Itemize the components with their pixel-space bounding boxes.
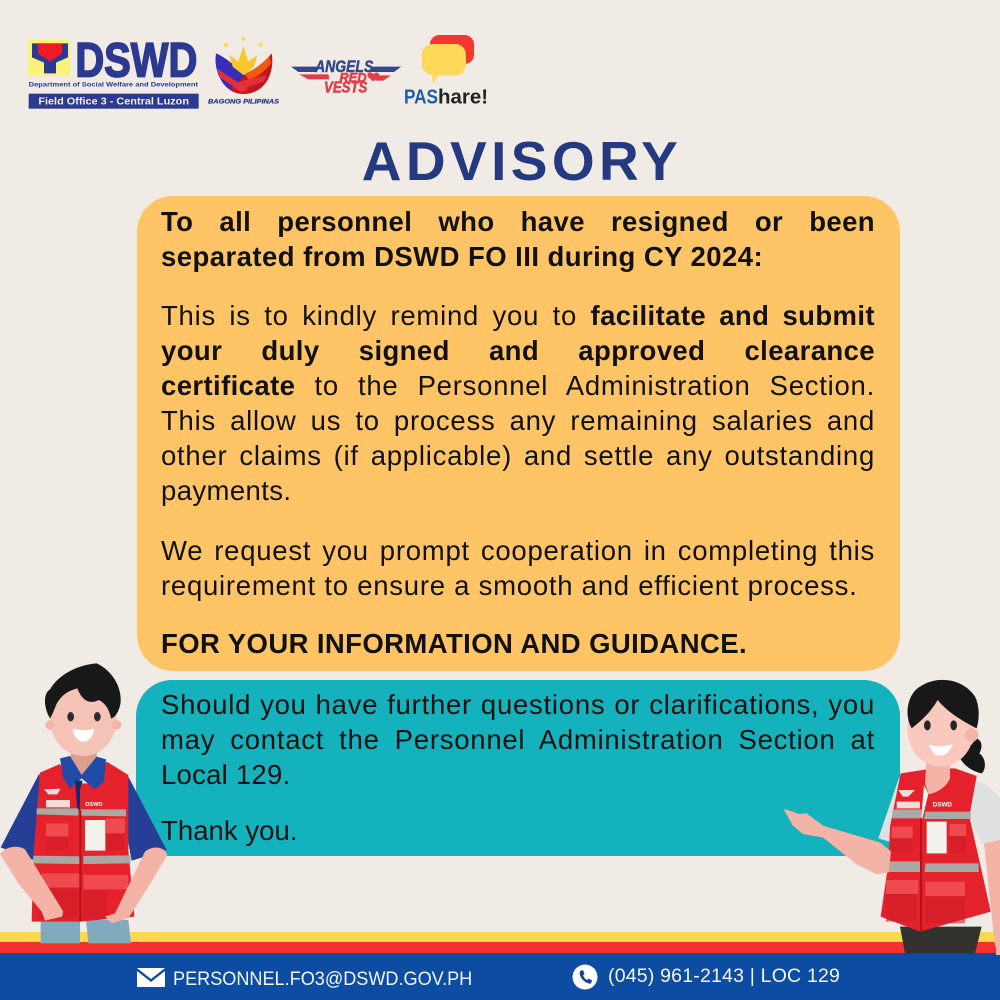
logo: Angels in Red Vests (291, 57, 401, 97)
advisory text: We request you prompt cooperation in completing this (161, 535, 875, 566)
advisory text: your duly signed and approved clearance (161, 335, 875, 366)
character: man in red vest (0, 663, 168, 944)
logo: Bagong Pilipinas: BAGONG PILIPINAS (208, 100, 279, 106)
advisory text: This is to kindly remind you to facilitate and submit (161, 300, 875, 331)
contact text: may contact the Personnel Administration Section at (161, 724, 875, 755)
character: man in red vest: DSWD (85, 802, 103, 808)
logo: Angels in Red Vests: RED (339, 70, 367, 85)
advisory text: payments. (161, 475, 291, 506)
logo: Angels in Red Vests: ANGELS (314, 57, 373, 76)
panel: advisory message (137, 196, 900, 671)
logo: PAShare: PAS (404, 86, 438, 108)
logo: DSWD: Field Office 3 - Central Luzon (38, 97, 189, 108)
logo: DSWD (28, 34, 199, 109)
icon: envelope (137, 968, 165, 987)
advisory text: FOR YOUR INFORMATION AND GUIDANCE. (161, 628, 747, 659)
bottom colour bands (0, 932, 1000, 1000)
logos row (28, 34, 488, 109)
advisory text: This allow us to process any remaining salaries and (161, 405, 875, 436)
phone number: (045) 961-2143 | LOC 129 (608, 965, 840, 987)
advisory text: certificate to the Personnel Administration Section. (161, 370, 875, 401)
contact text: Should you have further questions or clarifications, you (161, 689, 875, 720)
logo: PAShare: hare! (438, 86, 488, 108)
title: ADVISORY (362, 130, 682, 192)
logo: Angels in Red Vests: VESTS (324, 80, 368, 97)
advisory text: other claims (if applicable) and settle any outstanding (161, 440, 875, 471)
panel: contact information (136, 680, 900, 856)
logo: Bagong Pilipinas (208, 37, 279, 106)
logo: DSWD: Department of Social Welfare and Development (29, 81, 199, 88)
logo: DSWD: DSWD (75, 34, 197, 88)
logo: PAShare (404, 35, 488, 108)
character: woman in red vest (784, 680, 1000, 955)
character: woman in red vest: DSWD (933, 802, 952, 809)
email address: PERSONNEL.FO3@DSWD.GOV.PH (173, 968, 472, 990)
contact text (161, 689, 875, 846)
contact text: Thank you. (161, 815, 298, 846)
contact text: Local 129. (161, 759, 290, 790)
advisory text: requirement to ensure a smooth and efficient process. (161, 570, 858, 601)
advisory text: separated from DSWD FO III during CY 2024: (161, 241, 763, 272)
advisory text (161, 206, 875, 659)
advisory text: To all personnel who have resigned or been (161, 206, 875, 237)
icon: phone (572, 964, 598, 990)
